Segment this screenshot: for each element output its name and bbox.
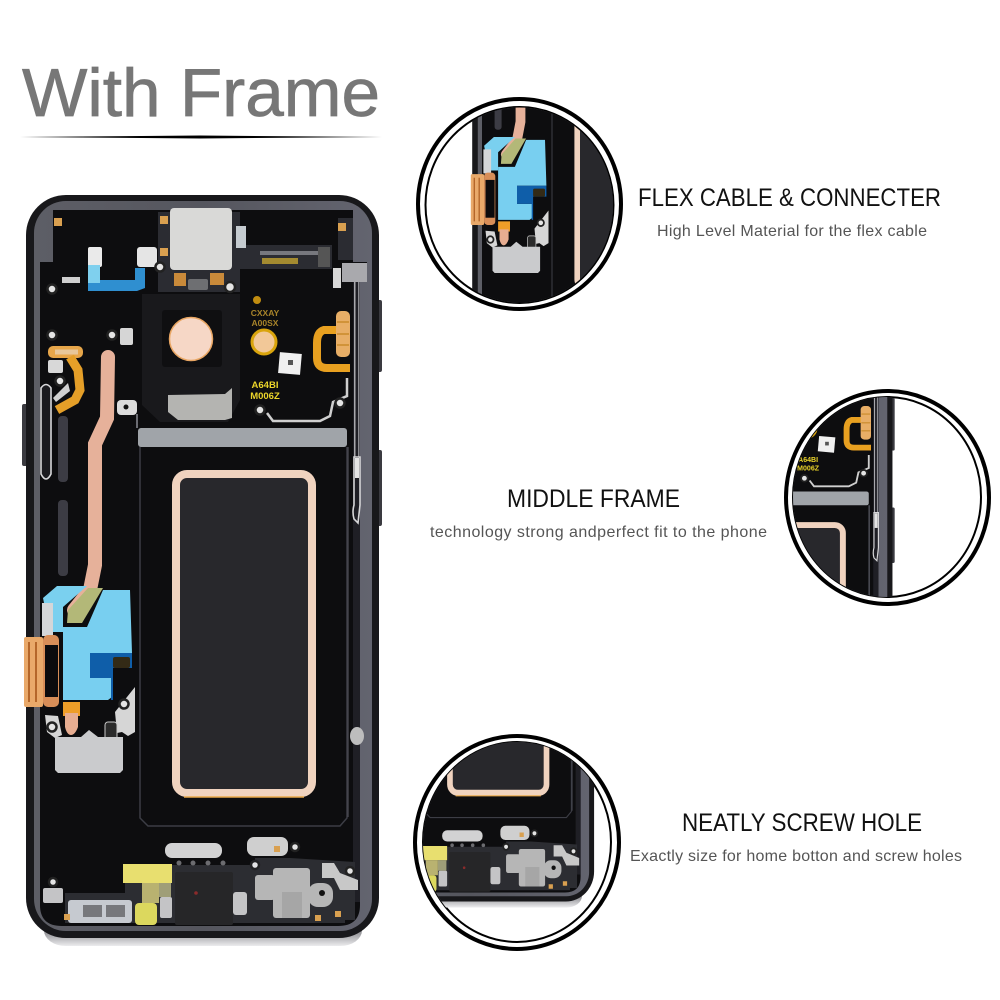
silver oval xyxy=(165,843,222,858)
dark blue patch xyxy=(90,653,132,700)
right channel xyxy=(347,282,360,902)
small white tab xyxy=(120,328,133,345)
heading: flex cable: FLEX CABLE & CONNECTER xyxy=(638,184,941,212)
black interior xyxy=(40,210,367,926)
silver grille xyxy=(68,900,132,923)
vent dots xyxy=(176,860,226,866)
printed gold marks: A64BI xyxy=(252,380,278,391)
blue flex cable top xyxy=(62,247,157,291)
printed gold marks xyxy=(250,308,280,402)
orange tail and copper tip xyxy=(63,702,80,735)
top PCB areas xyxy=(158,212,353,292)
bottom PCB band xyxy=(65,858,355,923)
camera connector details xyxy=(174,226,330,290)
rear camera silver plate xyxy=(170,208,232,270)
left screw xyxy=(56,376,64,386)
left flex cable xyxy=(48,346,83,410)
side buttons xyxy=(22,300,382,526)
silver tab with screw xyxy=(117,400,138,428)
blue adhesive sheet xyxy=(63,590,132,700)
printed gold marks: M006Z xyxy=(250,391,280,402)
bracket screw xyxy=(319,890,325,896)
silver shield xyxy=(168,388,232,420)
printed gold marks: CXXAY xyxy=(251,308,280,318)
small silver bracket xyxy=(247,837,288,856)
charge connector flex xyxy=(24,635,59,707)
phone body xyxy=(26,195,379,938)
white QR label xyxy=(278,352,302,375)
heading: screw hole: NEATLY SCREW HOLE xyxy=(682,809,922,837)
printed gold marks: A00SX xyxy=(252,318,279,328)
small chip xyxy=(113,657,130,668)
camera dark square xyxy=(162,310,222,367)
silver plate bottom xyxy=(55,730,123,773)
display window xyxy=(176,474,312,793)
caption: middle frame: technology strong andperfect fit to the phone xyxy=(430,524,767,541)
flex pads right xyxy=(336,311,350,357)
gray corner block and side rail xyxy=(333,263,367,523)
connector side frame white xyxy=(42,603,53,636)
title: With Frame xyxy=(22,55,380,131)
lens: flex cable xyxy=(416,97,623,311)
white brackets xyxy=(45,687,135,738)
screw holes xyxy=(48,262,344,414)
gray bar xyxy=(138,428,347,447)
bottom gold pads xyxy=(64,846,341,921)
peach sensor disc xyxy=(170,318,212,360)
bottom screws xyxy=(49,843,354,886)
small silver tabs xyxy=(43,888,247,918)
gold sensor disc xyxy=(252,330,276,354)
corner gold pads xyxy=(54,216,346,256)
lens: screw hole xyxy=(413,734,621,951)
lens: middle frame xyxy=(784,389,991,606)
ribbon over sheet xyxy=(67,588,103,623)
silver bottom lip xyxy=(44,915,362,946)
phone with frame xyxy=(22,195,382,946)
heading: middle frame: MIDDLE FRAME xyxy=(507,485,680,513)
camera module panel xyxy=(142,294,240,422)
caption: flex cable: High Level Material for the flex cable xyxy=(657,223,927,240)
silver trace xyxy=(267,378,347,421)
right silver piece xyxy=(322,863,358,890)
yellow flex xyxy=(123,864,172,925)
window gold edge xyxy=(184,796,304,798)
left side button loop xyxy=(41,384,51,479)
copper heat pipe xyxy=(74,357,108,610)
white dot xyxy=(350,727,364,745)
metal frame band xyxy=(34,201,372,931)
blue strip xyxy=(43,586,87,632)
small black component xyxy=(105,722,117,740)
orange flex right xyxy=(317,330,350,368)
inner rim lines xyxy=(140,447,347,826)
caption: screw hole: Exactly size for home botton and screw holes xyxy=(630,848,962,865)
title underline xyxy=(20,136,385,138)
dark mesh block xyxy=(175,872,233,925)
vent pills xyxy=(58,416,68,576)
silver home-button bracket xyxy=(255,868,333,918)
